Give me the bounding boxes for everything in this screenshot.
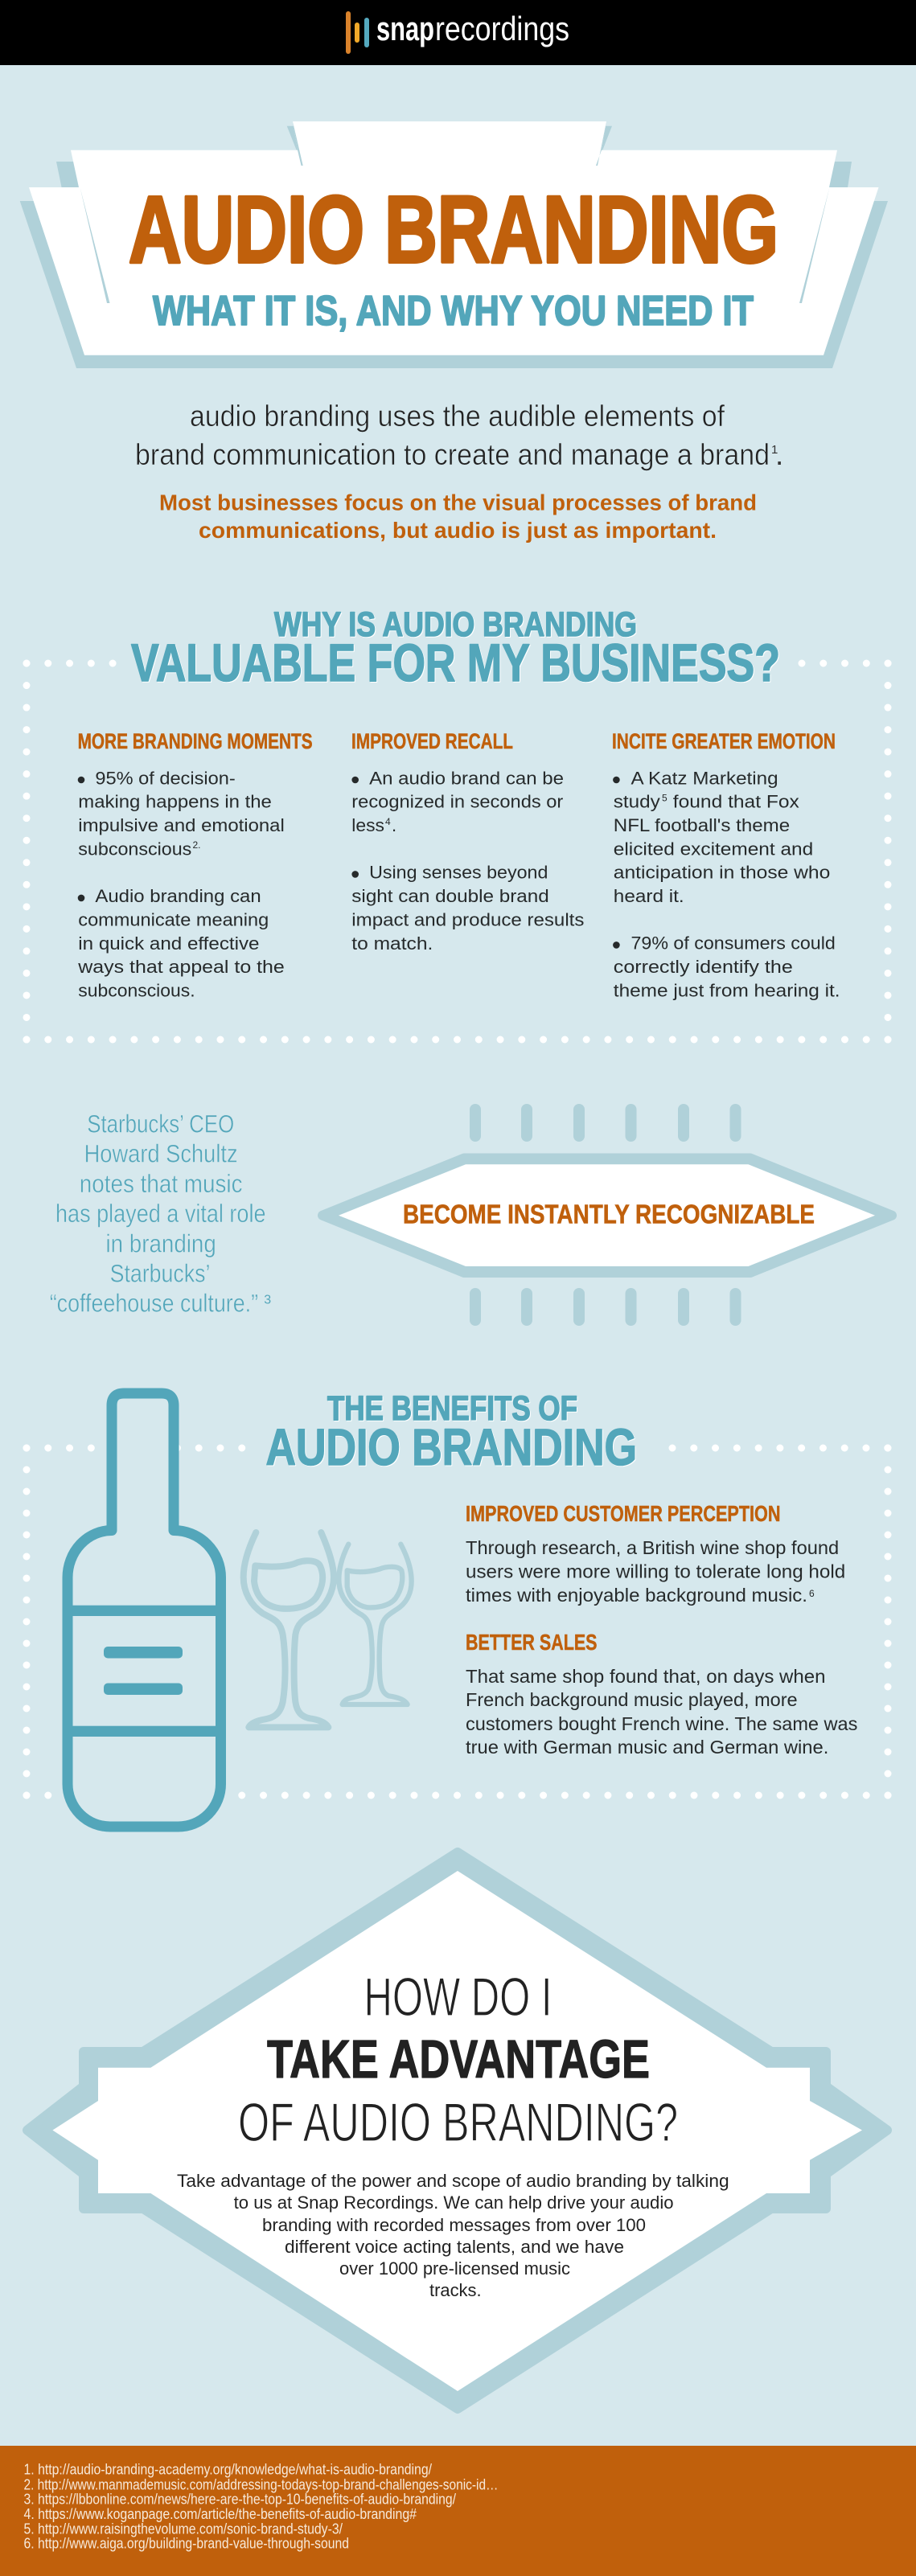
intro text: 1 <box>771 443 778 457</box>
column: incite greater emotion: theme just from hearing it. <box>614 980 840 1000</box>
heading: the benefits of audio branding: THE BENEFITS OF <box>327 1389 577 1428</box>
column: incite greater emotion: found that Fox <box>673 792 799 812</box>
footer: references: 2. http://www.manmademusic.com/addressing-todays-top-brand-challenges-sonic-id… <box>24 2476 499 2492</box>
column: improved recall: An audio brand can be <box>369 768 564 788</box>
column: incite greater emotion <box>612 729 840 1000</box>
text: improved customer perception: IMPROVED CUSTOMER PERCEPTION <box>466 1501 780 1526</box>
icon: wine bottle <box>68 1393 221 1827</box>
intro text: audio branding uses the audible elements of <box>190 400 725 433</box>
footer: references: 1. http://audio-branding-academy.org/knowledge/what-is-audio-branding/ <box>24 2462 432 2478</box>
paragraph: call to action: different voice acting talents, and we have <box>285 2237 624 2257</box>
callout: Starbucks quote: in branding <box>106 1229 216 1257</box>
logo: snaprecordings <box>346 10 569 54</box>
footer: references: 5. http://www.raisingthevolume.com/sonic-brand-study-3/ <box>24 2521 343 2537</box>
text: better sales: That same shop found that, on days when <box>466 1666 825 1687</box>
callout: Starbucks quote: Starbucks’ <box>110 1258 211 1287</box>
column: incite greater emotion: anticipation in those who <box>614 862 830 882</box>
paragraph: call to action: Take advantage of the power and scope of audio branding by talking <box>177 2171 729 2191</box>
callout: Starbucks quote: Starbucks’ CEO <box>87 1109 234 1138</box>
column: incite greater emotion: NFL football's theme <box>614 815 790 835</box>
callout: Starbucks quote: Howard Schultz <box>84 1139 238 1168</box>
column: incite greater emotion: heard it. <box>614 886 684 906</box>
column: incite greater emotion: correctly identify the <box>614 957 793 977</box>
text: better sales: customers bought French wine. The same was <box>466 1713 857 1734</box>
column: more branding moments: ways that appeal to the <box>77 957 285 977</box>
sound-wave tick marks <box>470 1104 741 1326</box>
orange statement: Most businesses focus on the visual processes of brand <box>159 490 757 515</box>
column: incite greater emotion: 5 <box>662 793 667 804</box>
column: more branding moments: 95% of decision- <box>95 768 236 788</box>
column: improved recall: less <box>351 815 384 835</box>
paragraph: call to action: over 1000 pre-licensed music <box>339 2258 570 2279</box>
paragraph: call to action: to us at Snap Recordings. We can help drive your audio <box>234 2192 674 2213</box>
callout: Starbucks quote: has played a vital role <box>55 1199 265 1228</box>
panel: benefits of audio branding <box>27 1389 889 1827</box>
hexagon: become instantly recognizable <box>322 1158 892 1273</box>
column: improved recall: sight can double brand <box>351 886 549 906</box>
column: incite greater emotion: study <box>614 792 660 812</box>
callout: Starbucks quote: “coffeehouse culture.” <box>50 1289 258 1318</box>
column: improved recall: IMPROVED RECALL <box>351 729 513 753</box>
text: better sales: French background music played, more <box>466 1689 798 1710</box>
column: improved recall: to match. <box>351 933 433 954</box>
column: improved recall: impact and produce results <box>351 909 584 929</box>
text: better sales: true with German music and German wine. <box>466 1737 828 1758</box>
column: more branding moments: subconscious. <box>78 980 195 1000</box>
text: improved customer perception <box>466 1501 845 1606</box>
paragraph: call to action <box>177 2171 729 2300</box>
heading: how do I take advantage of audio branding: HOW DO I <box>364 1967 552 2028</box>
text: better sales <box>466 1630 857 1758</box>
paragraph: call to action: tracks. <box>429 2280 482 2300</box>
column: more branding moments: communicate meaning <box>78 909 269 929</box>
intro text <box>135 400 783 471</box>
heading: why is audio branding valuable: WHY IS AUDIO BRANDING <box>274 605 637 644</box>
text: improved customer perception: 6 <box>809 1588 815 1599</box>
logo: snaprecordings: recordings <box>435 10 569 47</box>
column: improved recall: . <box>392 815 396 835</box>
column: more branding moments: impulsive and emotional <box>78 815 285 835</box>
heading: the benefits of audio branding: AUDIO BRANDING <box>265 1418 637 1476</box>
column: improved recall: Using senses beyond <box>369 862 548 882</box>
column: more branding moments <box>77 729 313 1000</box>
text: improved customer perception: times with enjoyable background music. <box>466 1585 807 1606</box>
title banner <box>20 121 888 368</box>
heading: how do I take advantage of audio branding <box>238 1967 678 2153</box>
callout: Starbucks quote: notes that music <box>80 1169 243 1198</box>
callout: Starbucks quote <box>50 1109 271 1318</box>
subtitle: WHAT IT IS, AND WHY YOU NEED IT <box>153 288 754 334</box>
footer: references: 3. https://lbbonline.com/news/here-are-the-top-10-benefits-of-audio-branding/ <box>24 2492 456 2508</box>
column: improved recall: recognized in seconds or <box>351 792 563 812</box>
paragraph: call to action: branding with recorded messages from over 100 <box>262 2215 646 2235</box>
heading: how do I take advantage of audio branding: TAKE ADVANTAGE <box>267 2029 650 2090</box>
header bar with logo <box>0 0 916 65</box>
column: incite greater emotion: A Katz Marketing <box>631 768 778 788</box>
intro text: . <box>775 438 783 471</box>
orange statement: communications, but audio is just as important. <box>199 518 717 543</box>
logo: snaprecordings: snap <box>376 10 434 47</box>
column: more branding moments: subconscious <box>78 839 191 859</box>
diamond panel: how do I take advantage <box>27 1852 887 2409</box>
column: incite greater emotion: 79% of consumers could <box>631 933 836 953</box>
text: improved customer perception: Through research, a British wine shop found <box>466 1537 839 1558</box>
heading: the benefits of audio branding <box>265 1389 637 1476</box>
hexagon: become instantly recognizable: BECOME INSTANTLY RECOGNIZABLE <box>403 1200 815 1229</box>
footer: references: 4. https://www.koganpage.com/article/the-benefits-of-audio-branding# <box>24 2506 417 2522</box>
panel: why valuable <box>27 605 889 1040</box>
heading: how do I take advantage of audio branding: OF AUDIO BRANDING? <box>238 2092 678 2153</box>
intro text: brand communication to create and manage a brand <box>135 438 770 471</box>
column: improved recall: 4 <box>385 816 391 827</box>
text: improved customer perception: users were more willing to tolerate long hold <box>466 1561 845 1582</box>
column: incite greater emotion: elicited excitement and <box>614 839 813 859</box>
footer: references <box>0 2446 916 2576</box>
footer: references: 6. http://www.aiga.org/building-brand-value-through-sound <box>24 2536 349 2552</box>
column: improved recall <box>351 729 584 954</box>
text: better sales: BETTER SALES <box>466 1630 597 1655</box>
column: more branding moments: 2. <box>193 839 201 851</box>
column: more branding moments: in quick and effective <box>78 933 259 954</box>
heading: why is audio branding valuable <box>131 605 780 692</box>
column: more branding moments: Audio branding can <box>95 886 261 906</box>
column: more branding moments: MORE BRANDING MOMENTS <box>78 729 313 753</box>
callout: Starbucks quote: 3 <box>264 1294 271 1307</box>
column: incite greater emotion: INCITE GREATER EMOTION <box>612 729 836 753</box>
orange statement <box>159 490 757 543</box>
icon: wine glasses <box>244 1532 412 1727</box>
column: more branding moments: making happens in the <box>78 792 272 812</box>
